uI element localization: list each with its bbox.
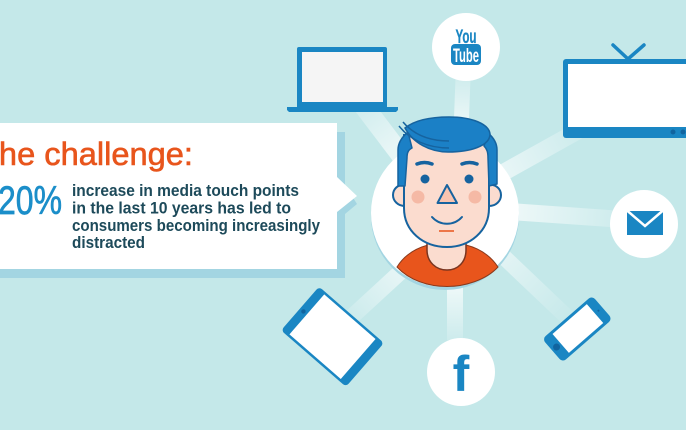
statistic: 20%: 20% <box>0 179 62 223</box>
icon: Facebook: f <box>453 346 470 402</box>
face <box>404 135 489 247</box>
icon: laptop <box>287 47 398 112</box>
icon: YouTube: Tube <box>453 46 479 67</box>
callout body <box>0 123 357 269</box>
hair top <box>405 117 490 152</box>
icon: Facebook <box>427 338 495 406</box>
cheeks <box>412 190 482 204</box>
eyebrows <box>417 162 477 164</box>
icon: YouTube: You <box>456 27 476 48</box>
callout shadow <box>0 132 357 278</box>
icon: phone <box>542 296 612 362</box>
character portrait <box>371 117 519 290</box>
body text: increase in media touch points <box>72 182 299 200</box>
icon: YouTube <box>432 13 500 81</box>
eyes <box>420 174 474 184</box>
body text <box>72 182 321 252</box>
panel: challenge callout <box>0 123 357 278</box>
body text: distracted <box>72 234 145 252</box>
white circle <box>371 139 519 287</box>
connector rays <box>345 78 612 340</box>
lower lip <box>439 230 454 232</box>
icon: email <box>610 190 678 258</box>
hair sides <box>398 132 497 186</box>
icon: television <box>563 45 686 138</box>
body text: in the last 10 years has led to <box>72 200 291 218</box>
icon: tablet <box>281 287 384 387</box>
shirt <box>397 245 498 286</box>
smile <box>432 217 462 224</box>
neck <box>427 240 466 270</box>
nose <box>438 185 457 203</box>
hair strands <box>399 122 449 148</box>
circle shadow <box>371 142 519 290</box>
body text: consumers becoming increasingly <box>72 217 321 235</box>
ears <box>393 185 501 206</box>
